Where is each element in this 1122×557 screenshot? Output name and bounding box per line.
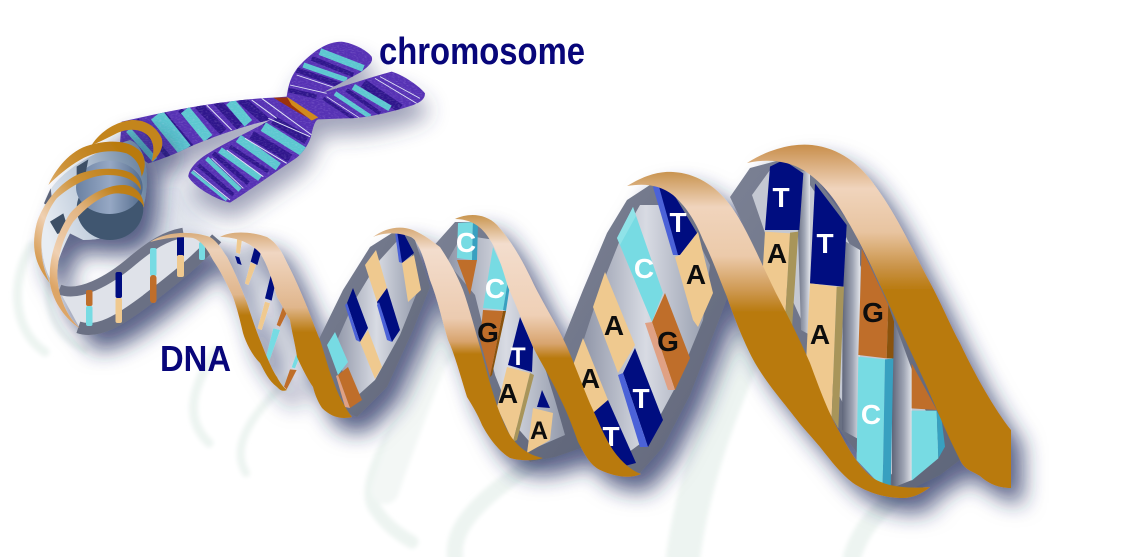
base letter: T: T	[602, 421, 620, 452]
background: pale ghost ribbons	[17, 245, 935, 557]
base letter: A: A	[767, 238, 787, 269]
backbone: third turn	[430, 222, 590, 462]
base pairs: fourth turn	[572, 183, 713, 468]
backbone: fourth turn	[563, 183, 732, 473]
base letter: T: T	[816, 228, 834, 259]
base pairs: fifth turn	[763, 160, 945, 488]
base letters: fifth turn	[767, 182, 884, 430]
ribbon: coil front strand	[50, 185, 144, 328]
ribbon: turn 5	[747, 145, 1011, 488]
base letter: A: A	[810, 319, 830, 350]
base letter: A: A	[686, 259, 706, 290]
chromosome	[120, 30, 440, 220]
coil strands	[34, 120, 162, 283]
base letter: C: C	[456, 227, 476, 258]
base letter: A: A	[530, 417, 548, 445]
base pairs: between first two strands	[235, 237, 299, 389]
base letter: T: T	[772, 182, 790, 213]
base letter: T: T	[669, 207, 687, 238]
front strand ribbons	[50, 145, 1011, 498]
base pairs: second turn	[327, 230, 421, 408]
base letter: C: C	[485, 273, 505, 304]
ribbon: turn 4	[627, 172, 930, 498]
label: chromosome: chromosome	[379, 31, 585, 73]
centromere	[273, 97, 318, 121]
backbone: fifth turn	[730, 160, 960, 492]
DNA helix	[34, 120, 1011, 498]
base letter: A: A	[604, 310, 624, 341]
base letter: G: G	[657, 326, 679, 357]
base letter: G: G	[477, 317, 499, 348]
base letter: A: A	[498, 378, 518, 409]
base letter: G: G	[862, 297, 884, 328]
base letter: T: T	[510, 343, 526, 371]
ribbon: turn 3	[455, 215, 641, 477]
base pairs: first turn	[86, 235, 205, 326]
base pairs: third turn	[456, 222, 553, 453]
base letter: C: C	[861, 399, 881, 430]
backbone: first turn	[59, 233, 217, 329]
coil: condensed DNA wound around the chromosome end	[34, 120, 162, 283]
chromosome body	[120, 30, 440, 220]
coil interior	[41, 140, 147, 283]
ribbon: turn 2	[373, 228, 543, 460]
label: DNA: DNA	[160, 338, 231, 379]
base letter: C: C	[634, 253, 654, 284]
backbone: second turn	[317, 228, 430, 417]
ribbon: turn 1b	[220, 232, 352, 418]
ribbon: turn 1a	[150, 233, 287, 391]
base letter: T: T	[632, 383, 650, 414]
base letter: A: A	[580, 363, 600, 394]
inter-base gaps	[796, 170, 810, 335]
soft glow behind coil	[120, 175, 210, 255]
